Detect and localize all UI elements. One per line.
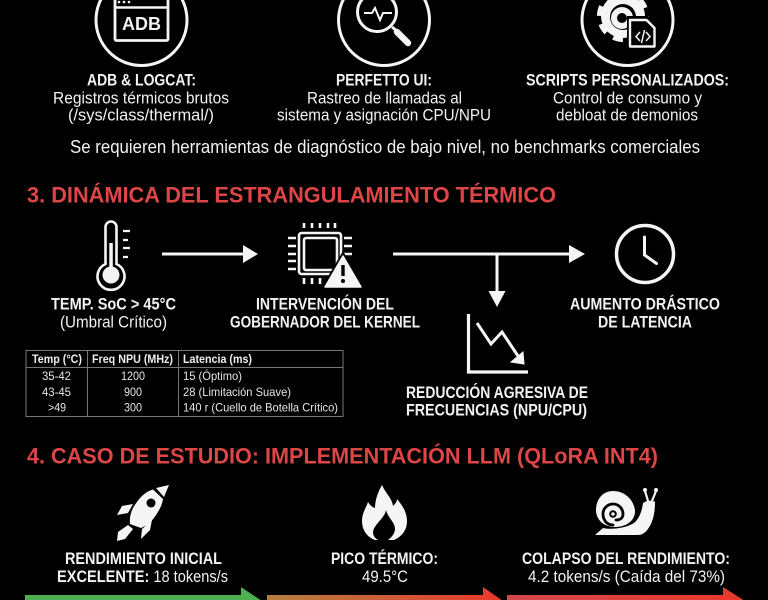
text: ADB & Logcat: Registros térmicos brutos [53, 90, 229, 108]
case: pico térmico [267, 485, 503, 600]
text: colapso del rendimiento: COLAPSO DEL RENDIMIENTO: [522, 550, 730, 568]
table: temperatura, frecuencia y latencia: 140 r (Cuello de Botella Crítico) [183, 400, 338, 414]
text: temperatura SoC: (Umbral Crítico) [60, 314, 167, 332]
text: pico térmico [331, 549, 438, 586]
text: ADB & Logcat [53, 72, 229, 124]
table: temperatura, frecuencia y latencia: Temp (°C) [32, 352, 82, 366]
arrow: verde [25, 587, 262, 600]
case: rendimiento inicial [25, 485, 262, 600]
text: nota sobre herramientas: Se requieren herramientas de diagnóstico de bajo nivel, no benchmarks comerciales [70, 137, 700, 157]
text: Perfetto UI: PERFETTO UI: [336, 72, 432, 90]
text: aumento de latencia: AUMENTO DRÁSTICO [570, 294, 720, 314]
text: pico térmico: 49.5°C [362, 568, 408, 586]
arrow: naranja a rojo [267, 587, 503, 600]
table: temperatura, frecuencia y latencia: 15 (Óptimo) [183, 368, 242, 383]
text: aumento de latencia [570, 294, 720, 332]
text: colapso del rendimiento [522, 550, 730, 586]
icon: ADB terminal window [96, 0, 187, 66]
icon: falling chart [468, 314, 528, 372]
text: scripts personalizados: debloat de demonios [556, 106, 698, 124]
text: rendimiento inicial: RENDIMIENTO INICIAL [65, 550, 222, 568]
text: pico térmico: PICO TÉRMICO: [331, 549, 438, 568]
table: temperatura, frecuencia y latencia: Latencia (ms) [183, 352, 252, 366]
icon: clock [616, 226, 674, 282]
text: ADB & Logcat: (/sys/class/thermal/) [68, 106, 214, 124]
text: intervención del gobernador [230, 294, 420, 332]
table: temperatura, frecuencia y latencia: 1200 [121, 369, 145, 383]
heading: sección 4: 4. CASO DE ESTUDIO: IMPLEMENTACIÓN LLM (QLoRA INT4) [27, 444, 658, 468]
text: Perfetto UI [277, 72, 491, 124]
table: temperatura, frecuencia y latencia: 43-45 [42, 385, 71, 399]
text: Perfetto UI: Rastreo de llamadas al [307, 90, 462, 108]
text: ADB & Logcat: ADB & LOGCAT: [87, 72, 196, 90]
text: scripts personalizados: SCRIPTS PERSONALIZADOS: [526, 72, 729, 90]
text: temperatura SoC: TEMP. SoC > 45°C [51, 296, 176, 314]
text: reducción de frecuencias: REDUCCIÓN AGRESIVA DE [406, 383, 588, 402]
text: reducción de frecuencias: FRECUENCIAS (NPU/CPU) [406, 402, 587, 420]
text: temperatura SoC [51, 296, 176, 332]
table: temperatura, frecuencia y latencia: 300 [124, 400, 142, 414]
panel: caso de estudio [25, 485, 745, 600]
arrow: temperatura a gobernador [162, 245, 258, 263]
icon: snail [595, 488, 658, 535]
heading: sección 3: 3. DINÁMICA DEL ESTRANGULAMIENTO TÉRMICO [27, 182, 556, 208]
icon: rocket [117, 485, 169, 541]
text: intervención del gobernador: GOBERNADOR DEL KERNEL [230, 314, 420, 332]
tool: ADB & Logcat [53, 0, 229, 124]
table: temperatura, frecuencia y latencia: 28 (Limitación Suave) [183, 385, 291, 399]
icon: thermometer [98, 222, 130, 290]
text: Perfetto UI: sistema y asignación CPU/NPU [277, 106, 491, 124]
icon: flame [362, 485, 407, 540]
table: temperatura, frecuencia y latencia: 900 [124, 385, 142, 399]
tool: scripts personalizados [526, 0, 729, 124]
table: temperatura, frecuencia y latencia: Freq NPU (MHz) [92, 352, 173, 366]
arrow: rama hacia reducción [488, 254, 506, 307]
text: colapso del rendimiento: 4.2 tokens/s (Caída del 73%) [528, 568, 725, 586]
text: intervención del gobernador: INTERVENCIÓN DEL [256, 294, 394, 314]
text: rendimiento inicial [57, 550, 228, 586]
table: temperatura, frecuencia y latencia: >49 [48, 400, 66, 414]
icon: chip with warning [288, 223, 366, 290]
icon: gear with code file [582, 0, 673, 66]
arrow: gobernador a latencia [393, 245, 585, 263]
text: aumento de latencia: DE LATENCIA [598, 314, 692, 332]
icon: magnifier with pulse [338, 0, 430, 66]
panel: herramientas de diagnóstico [53, 0, 729, 157]
icon: ADB terminal window: ADB [122, 14, 161, 34]
text: reducción de frecuencias [406, 383, 588, 420]
case: colapso del rendimiento [507, 488, 745, 600]
table: temperatura, frecuencia y latencia: 35-42 [42, 369, 71, 383]
text: scripts personalizados [526, 72, 729, 124]
table: temperatura, frecuencia y latencia [26, 350, 343, 416]
arrow: rojo [507, 587, 745, 600]
text: rendimiento inicial: EXCELENTE: 18 tokens/s [57, 568, 228, 586]
text: scripts personalizados: Control de consumo y [553, 90, 703, 108]
tool: Perfetto UI [277, 0, 491, 124]
panel: flujo de estrangulamiento térmico [26, 222, 720, 420]
